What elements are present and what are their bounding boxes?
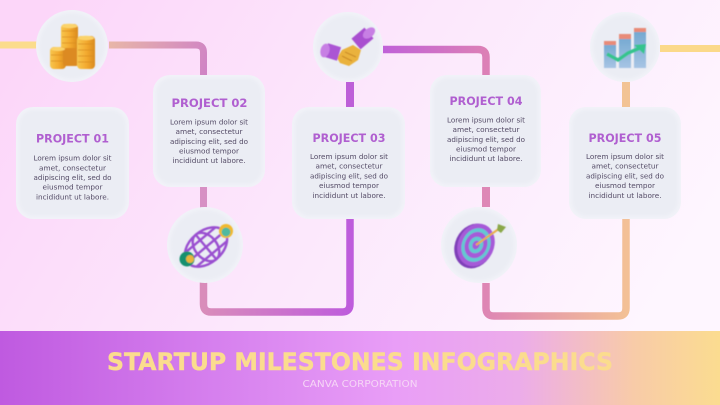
text: project 03 description: incididunt ut labore.: [312, 192, 386, 200]
text: project 02 description: Lorem ipsum dolor sit: [170, 118, 248, 126]
text: project 05 description: eiusmod tempor: [595, 182, 655, 190]
icon: bar chart with arrow: [590, 12, 660, 82]
text: project 05 description: [586, 153, 664, 200]
text: project 04 description: incididunt ut labore.: [450, 155, 522, 163]
connector: globe to project 03: [204, 219, 350, 312]
panel: project 02: [153, 75, 265, 187]
heading: project 02: PROJECT 02: [172, 96, 248, 110]
text: project 03 description: eiusmod tempor: [319, 182, 379, 190]
icon: gold coin stacks: [36, 10, 108, 82]
text: project 03 description: adipiscing elit, sed do: [310, 172, 388, 180]
connector: project 04 to target: [482, 187, 490, 207]
text: project 01 description: [34, 154, 112, 202]
text: project 05 description: Lorem ipsum dolor sit: [586, 153, 664, 161]
text: project 05 description: adipiscing elit, sed do: [586, 172, 664, 180]
icon: handshake: [313, 12, 383, 82]
text: project 03 description: Lorem ipsum dolor sit: [310, 153, 388, 161]
heading: project 05: PROJECT 05: [588, 131, 662, 145]
heading: project 04: PROJECT 04: [450, 94, 522, 108]
text: project 05 description: amet, consectetur: [592, 162, 659, 170]
title: STARTUP MILESTONES INFOGRAPHICS: [107, 348, 613, 376]
connector: handshake to project 03: [346, 82, 354, 108]
heading: project 03: PROJECT 03: [312, 131, 386, 145]
text: project 02 description: incididunt ut labore.: [172, 157, 246, 165]
connector: yellow end line: [660, 45, 720, 52]
text: project 04 description: eiusmod tempor: [456, 146, 516, 154]
panel: project 05: [569, 107, 681, 219]
text: project 02 description: amet, consectetur: [176, 128, 243, 136]
text: project 02 description: [170, 118, 248, 165]
connector: coins to project 02: [109, 45, 204, 76]
text: project 04 description: [447, 116, 525, 163]
text: project 04 description: amet, consectetur: [452, 126, 520, 134]
text: project 04 description: Lorem ipsum dolor sit: [447, 116, 525, 124]
connector: project 02 to globe: [200, 187, 207, 208]
text: project 03 description: amet, consectetur: [316, 162, 383, 170]
panel: project 01: [16, 107, 129, 219]
connector: handshake to project 04: [383, 50, 486, 76]
text: project 05 description: incididunt ut labore.: [588, 192, 662, 200]
connector: yellow start line: [0, 42, 37, 48]
text: project 01 description: Lorem ipsum dolor sit: [34, 154, 112, 162]
icon: globe with coins: [167, 207, 243, 283]
icon: target with arrow: [441, 207, 517, 283]
text: project 01 description: adipiscing elit, sed do: [34, 174, 112, 182]
panel: project 04: [430, 75, 541, 187]
text: project 04 description: adipiscing elit, sed do: [447, 136, 525, 144]
text: project 01 description: incididunt ut labore.: [36, 194, 109, 202]
panel: project 03: [292, 107, 405, 219]
text: project 01 description: eiusmod tempor: [42, 184, 103, 192]
connector: chart to project 05: [622, 82, 630, 108]
heading: project 01: PROJECT 01: [36, 132, 109, 146]
text: project 02 description: adipiscing elit, sed do: [170, 138, 248, 146]
text: project 01 description: amet, consectetur: [39, 164, 106, 172]
text: project 02 description: eiusmod tempor: [179, 148, 239, 156]
connector: target to project 05: [486, 219, 626, 316]
text: project 03 description: [310, 153, 388, 200]
title banner: [0, 331, 720, 405]
subtitle: CANVA CORPORATION: [302, 379, 418, 390]
